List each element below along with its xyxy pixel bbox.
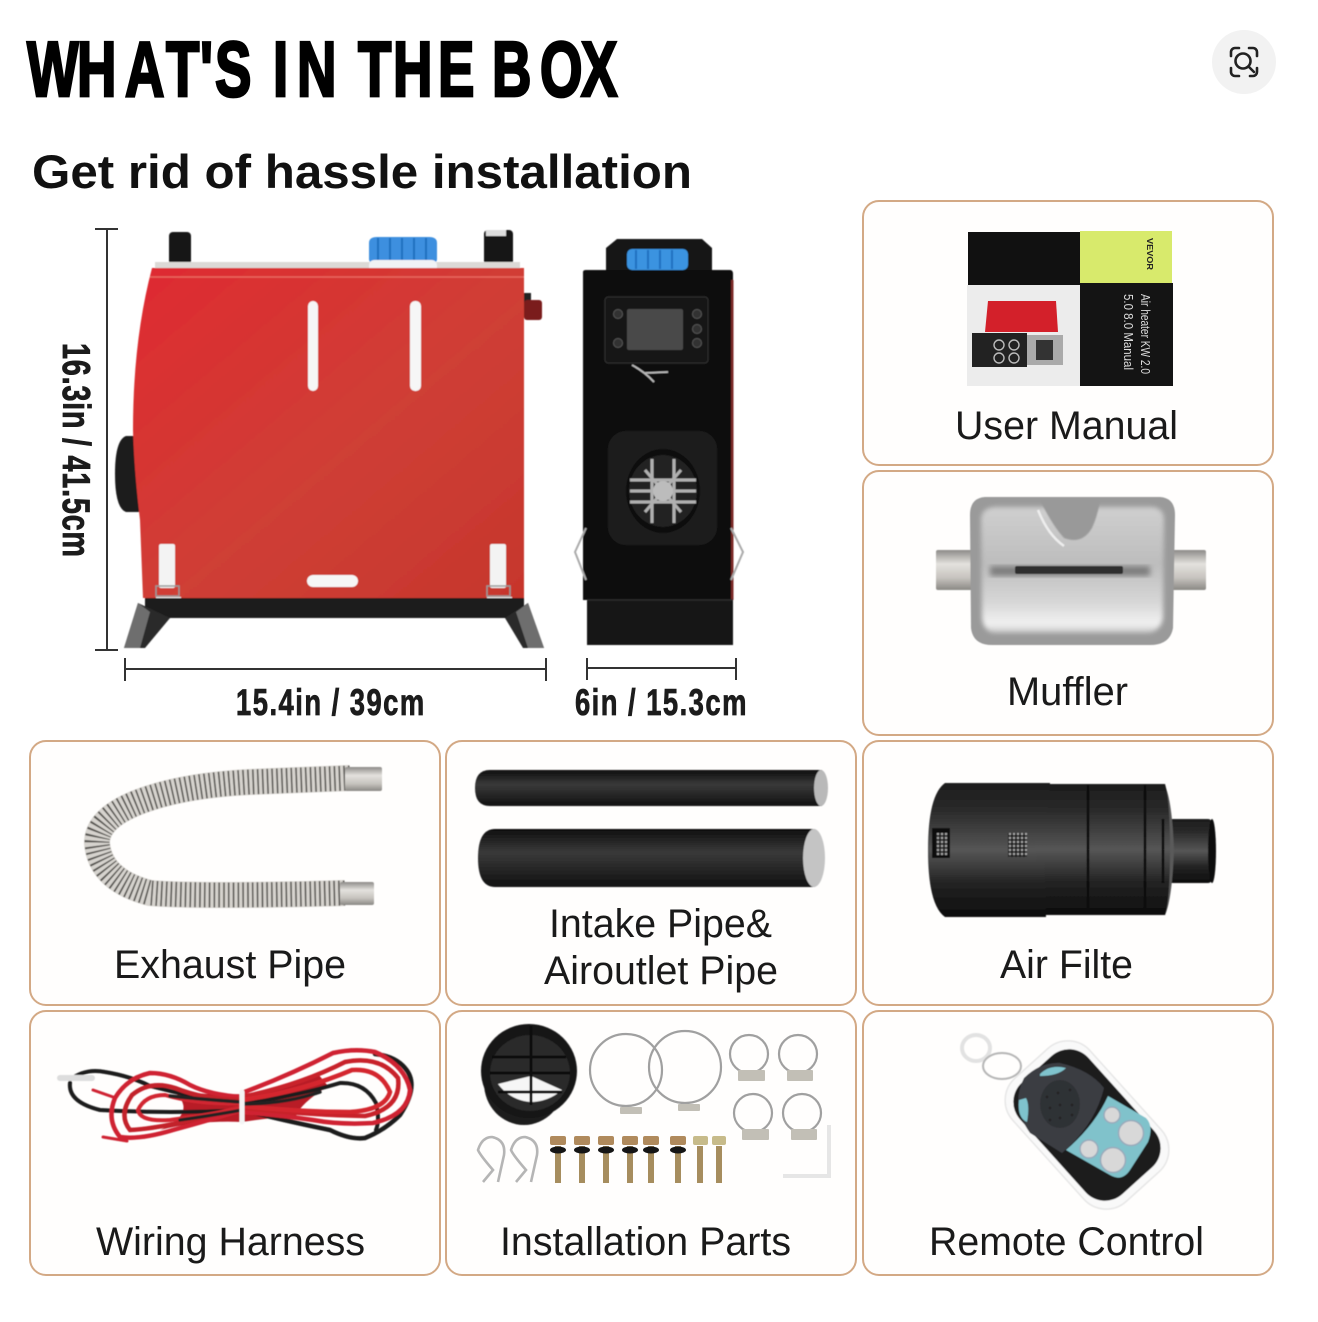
key fob	[962, 1029, 1181, 1221]
label: Exhaust Pipe	[114, 943, 346, 987]
air vent	[481, 1024, 577, 1125]
muffler illustration	[936, 497, 1206, 645]
flexible exhaust pipe	[97, 767, 382, 905]
height dimension label: 16.3in / 41.5cm	[54, 343, 97, 558]
label: User Manual	[955, 404, 1178, 448]
height dimension line	[95, 229, 118, 650]
panel: intake and air outlet pipes	[446, 741, 856, 1005]
heater red body	[133, 268, 524, 598]
width dimension line	[125, 658, 546, 681]
subtitle: Get rid of hassle installation	[32, 145, 692, 198]
front handle and cap	[606, 239, 712, 270]
panel: air filter	[863, 741, 1273, 1005]
label	[544, 902, 778, 993]
label: Intake Pipe&	[549, 902, 772, 946]
heater fuel cap	[369, 237, 437, 272]
pipes	[475, 770, 828, 887]
depth dimension label: 6in / 15.3cm	[575, 682, 748, 723]
hose clamps	[590, 1031, 821, 1132]
width dimension label: 15.4in / 39cm	[236, 682, 426, 723]
air filter illustration	[928, 783, 1216, 917]
panel: remote control	[863, 1011, 1273, 1275]
manual booklet: 5.0 8.0 Manual	[1121, 294, 1136, 370]
l-bracket	[783, 1125, 829, 1176]
heater front view	[575, 239, 743, 645]
label: Airoutlet Pipe	[544, 949, 778, 993]
label: Air Filte	[1000, 943, 1133, 987]
title: WHAT'S IN THE BOX	[27, 26, 617, 113]
heater side view	[115, 230, 544, 648]
depth dimension line	[587, 658, 736, 680]
heater rear duct	[115, 436, 140, 512]
clamp bands	[620, 1070, 817, 1140]
heater base and feet	[124, 598, 544, 648]
fan housing	[608, 431, 717, 545]
label: Wiring Harness	[96, 1220, 365, 1264]
panel: installation parts	[446, 1011, 856, 1275]
label: Installation Parts	[500, 1220, 791, 1264]
manual booklet: Air heater KW 2.0	[1138, 294, 1153, 374]
panel: exhaust pipe	[30, 741, 440, 1005]
manual booklet	[967, 231, 1173, 386]
label: Muffler	[1007, 670, 1128, 714]
heater slots	[307, 301, 421, 587]
side latches	[575, 528, 743, 580]
heater latches	[156, 544, 512, 605]
manual booklet: VEVOR	[1145, 238, 1154, 270]
heater handles	[169, 230, 513, 270]
icon: image search button	[1212, 30, 1276, 94]
panel: user manual	[863, 201, 1273, 465]
front black casing	[583, 270, 733, 600]
coiled wires	[60, 1050, 411, 1141]
panel: muffler	[863, 471, 1273, 735]
panel: wiring harness	[30, 1011, 440, 1275]
control panel display	[605, 297, 708, 363]
label: Remote Control	[929, 1220, 1204, 1264]
heater power connector	[524, 293, 542, 320]
p-clips	[478, 1137, 537, 1182]
screws	[550, 1136, 726, 1183]
